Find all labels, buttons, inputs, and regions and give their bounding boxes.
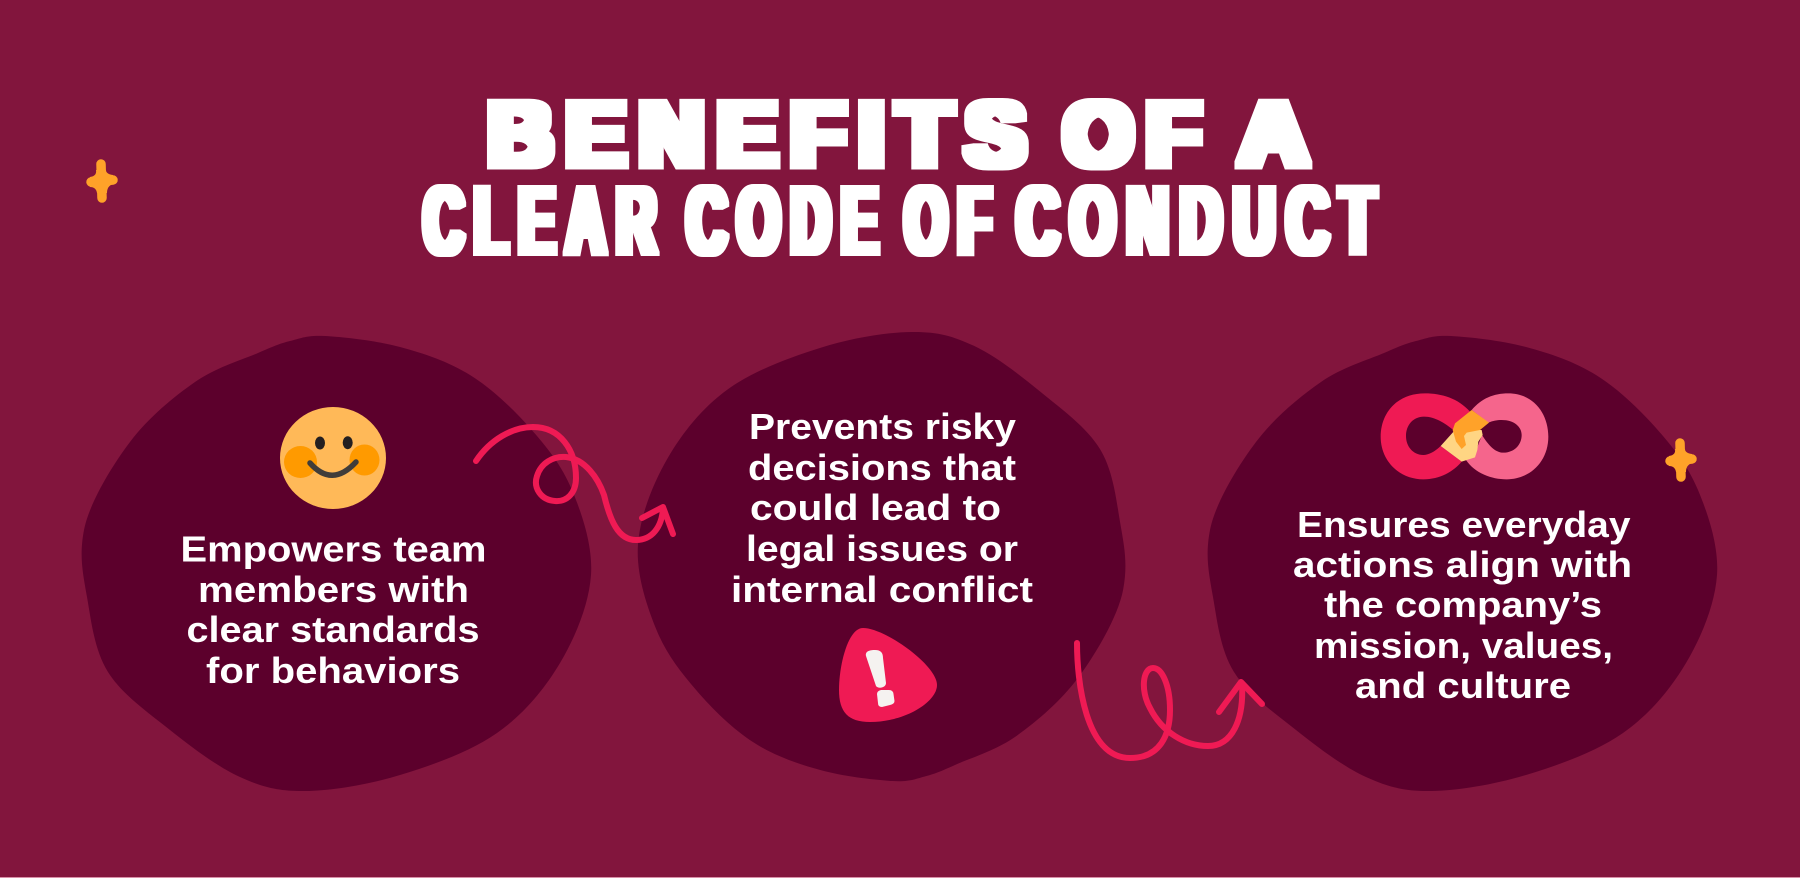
title line 1 xyxy=(488,84,1308,185)
sparkle: top left xyxy=(90,164,113,198)
title xyxy=(424,84,1387,275)
arrow: blob 1 to blob 2 xyxy=(476,427,673,540)
text: benefit 3: Ensures everyday xyxy=(1297,504,1630,545)
title line 2: CLEAR xyxy=(424,166,667,275)
title line 1: A xyxy=(1239,84,1308,185)
text: benefit 2: internal conflict xyxy=(731,569,1033,610)
text: benefit 3: and culture xyxy=(1355,665,1571,706)
text: benefit 2 xyxy=(731,406,1033,610)
text: benefit 2: decisions that xyxy=(748,447,1016,488)
text: benefit 3: the company’s xyxy=(1324,584,1602,625)
sparkle: right xyxy=(1669,443,1692,477)
title line 2 xyxy=(424,166,1387,275)
text: benefit 2: could lead to xyxy=(750,487,1001,528)
title line 1: BENEFITS xyxy=(488,84,1039,185)
text: benefit 1: for behaviors xyxy=(206,650,460,691)
text: benefit 1: members with xyxy=(198,569,469,610)
text: benefit 2: legal issues or xyxy=(746,528,1018,569)
arrow: blob 2 to blob 3 xyxy=(1077,643,1262,758)
title line 2: OF xyxy=(905,166,1002,275)
text: benefit 3 xyxy=(1293,504,1632,706)
panel: blob 1 xyxy=(82,336,591,791)
text: benefit 2: Prevents risky xyxy=(749,406,1016,447)
text: benefit 1 xyxy=(180,529,486,691)
icon: infinity with clasped hands xyxy=(1381,393,1548,479)
text: benefit 1: Empowers team xyxy=(180,529,486,570)
panel: blob 3 xyxy=(1208,336,1717,791)
text: benefit 3: actions align with xyxy=(1293,544,1632,585)
icon: alert xyxy=(839,628,937,722)
panel: blob 2 xyxy=(638,332,1125,781)
text: benefit 1: clear standards xyxy=(186,609,480,650)
title line 2: CONDUCT xyxy=(1017,166,1387,275)
text: benefit 3: mission, values, xyxy=(1314,625,1613,666)
icon: smiley face xyxy=(280,407,386,509)
title line 1: OF xyxy=(1064,84,1214,185)
title line 2: CODE xyxy=(687,166,889,275)
